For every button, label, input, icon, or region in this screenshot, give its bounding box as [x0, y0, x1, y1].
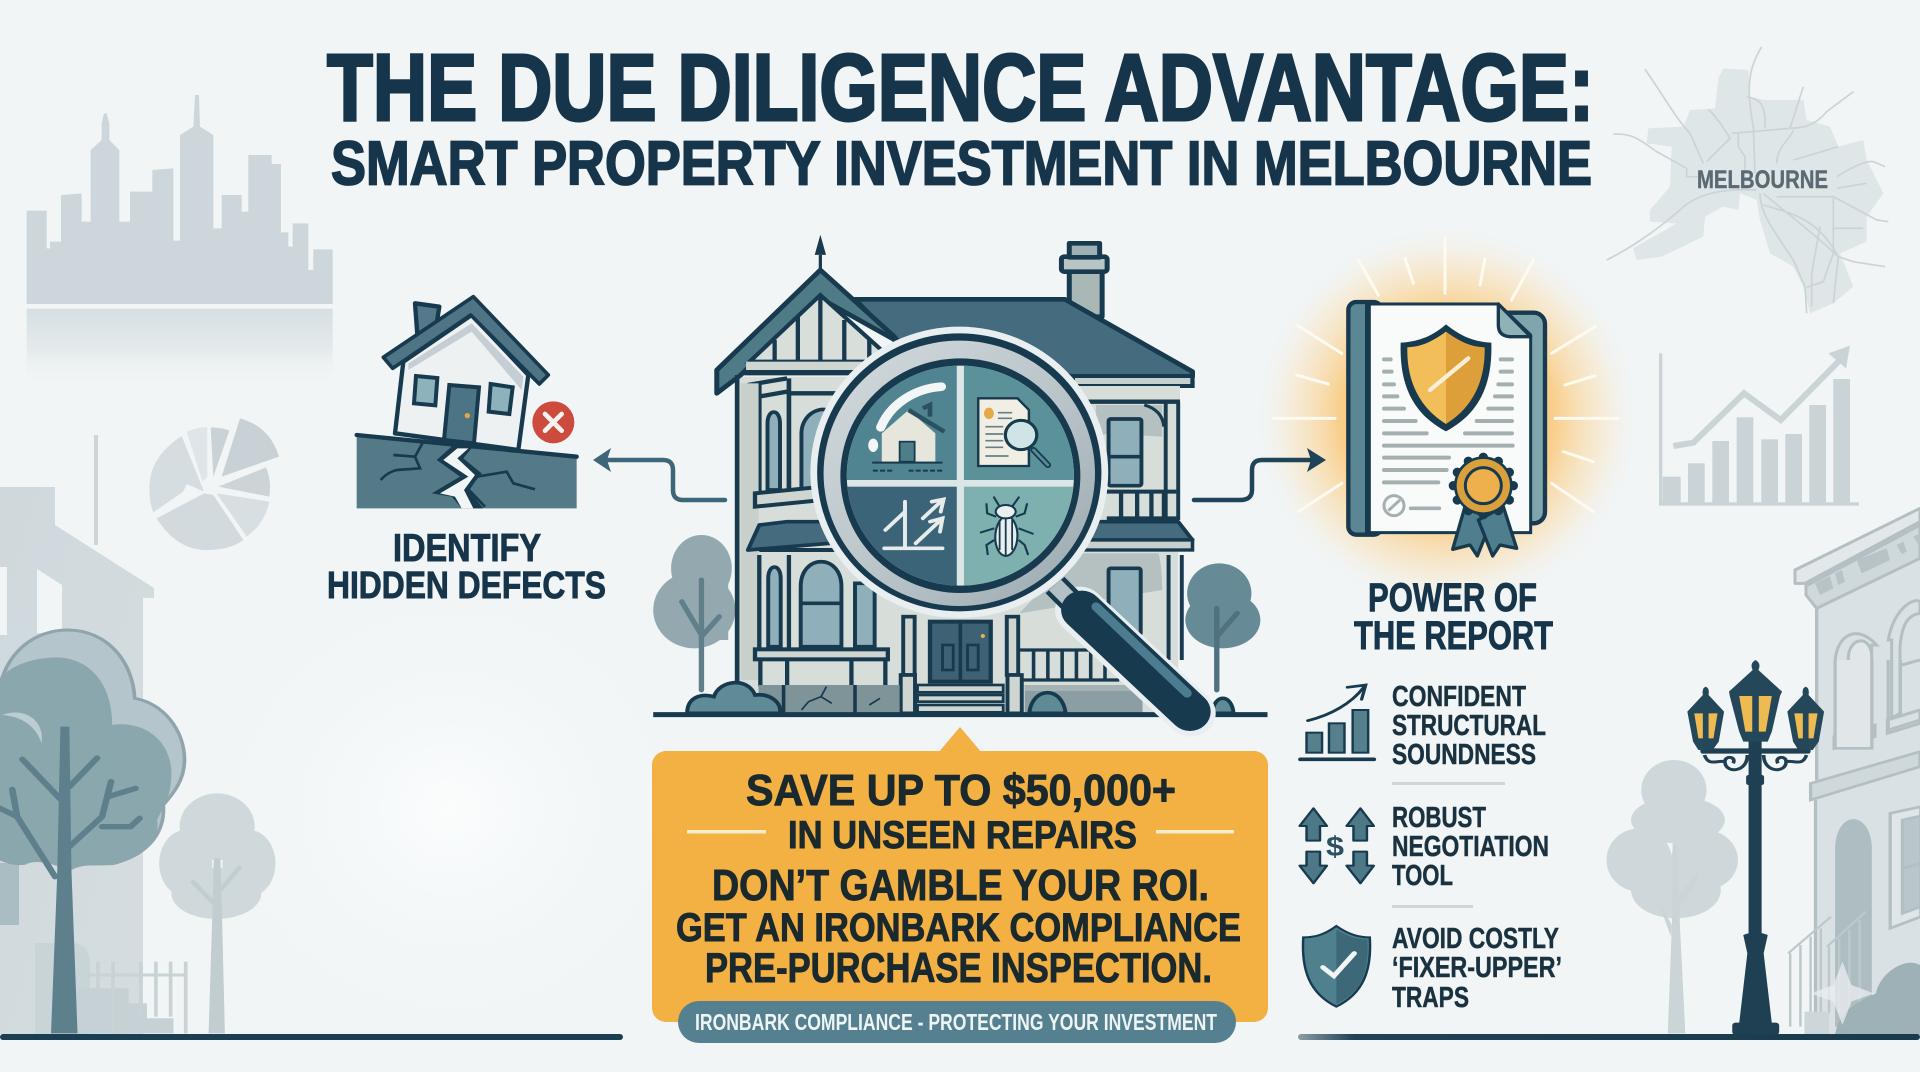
label: STRUCTURAL: [1392, 710, 1546, 742]
label: [1392, 802, 1549, 892]
chimney: [1061, 243, 1107, 317]
tree right of house: [1185, 563, 1260, 690]
lower left windows: [768, 562, 875, 647]
label: Melbourne: MELBOURNE: [1697, 166, 1828, 194]
canopy highlight: [2, 713, 42, 743]
label: SOUNDNESS: [1392, 739, 1536, 771]
cornice: [1795, 508, 1920, 780]
callout pointer: [938, 727, 982, 753]
skyline reflection: [27, 309, 333, 389]
lower left rail: [755, 649, 888, 659]
porch columns: [901, 617, 1022, 713]
walls: [395, 315, 528, 450]
icon: bar chart: [1300, 685, 1374, 759]
right upper window: [1109, 419, 1141, 486]
tree canopy outer: [0, 630, 184, 868]
ground line right: [1298, 1034, 1920, 1040]
ground: [653, 707, 1267, 722]
tree branches: [0, 758, 140, 877]
ground line left: [0, 1034, 623, 1040]
neck: [1055, 585, 1078, 608]
belt course: [1811, 752, 1920, 800]
roof: [383, 297, 548, 384]
canopy: [1607, 760, 1738, 918]
arrow: to report: [1194, 448, 1326, 500]
lamp post: [1700, 737, 1811, 1035]
trunk: [1217, 608, 1237, 690]
trunk: [682, 580, 719, 690]
trend arrow: [1673, 346, 1850, 446]
tree left of house: [653, 535, 735, 690]
building wall: [1815, 535, 1920, 1034]
label: AVOID COSTLY: [1392, 923, 1559, 955]
right balcony: [1107, 492, 1176, 518]
label: ROBUST: [1392, 802, 1486, 834]
savings headline: SAVE UP TO $50,000+: [746, 767, 1176, 815]
background: city skyline: [27, 95, 333, 389]
lamp scrolls: [1704, 755, 1807, 770]
spine: [1348, 302, 1382, 535]
report glow: [1252, 223, 1642, 613]
icon: defective house: [357, 297, 577, 508]
inner ring: [840, 358, 1080, 593]
background: Melbourne map: [1607, 47, 1888, 313]
upper windows: [1835, 660, 1920, 748]
center lantern: [1729, 660, 1782, 742]
skyline silhouette: [27, 95, 333, 304]
title line 1: THE DUE DILIGENCE ADVANTAGE:: [327, 35, 1594, 141]
tree trunk: [51, 727, 78, 1033]
outer halo: [810, 327, 1108, 618]
icon: shield check: [1303, 926, 1370, 1007]
magnifying glass: [810, 327, 1191, 713]
lens icon: growth: [884, 499, 944, 548]
page: [1369, 304, 1531, 533]
doorway: [1835, 819, 1872, 1027]
chimney: [415, 303, 439, 335]
main roof: [855, 299, 1192, 377]
dark window: [0, 863, 19, 925]
central fissure: [432, 445, 483, 508]
handle halo: [1080, 610, 1191, 713]
awning left: [748, 522, 830, 550]
lens icon: report: [978, 398, 1048, 466]
sparkle: [1811, 962, 1874, 1025]
callout box: [652, 751, 1268, 1022]
CTA text: DON’T GAMBLE YOUR ROI.: [712, 861, 1209, 910]
savings subhead: IN UNSEEN REPAIRS: [788, 814, 1137, 857]
label: [1392, 923, 1562, 1014]
text lines: [1384, 359, 1513, 482]
background: small tree: [159, 793, 276, 1033]
label: TOOL: [1392, 860, 1453, 892]
gable infill: [750, 295, 894, 362]
callout: savings and CTA: GET AN IRONBARK COMPLIANCE: [676, 906, 1241, 950]
background: right soft tree: [1607, 760, 1738, 1033]
metal band: [824, 341, 1095, 606]
upper left windows: [767, 409, 834, 490]
brand pill: [678, 1001, 1236, 1043]
trunk: [1658, 843, 1700, 1033]
mid band: [755, 487, 823, 507]
heading: power of the report: [1354, 576, 1553, 658]
label: [1392, 681, 1546, 771]
right lower window: [1109, 568, 1141, 635]
canopy: [653, 535, 735, 648]
background: growth chart: [1659, 346, 1859, 506]
benefit: negotiation tool: $: [1326, 831, 1344, 862]
bushes: [687, 683, 1234, 713]
canopy: [1185, 563, 1260, 648]
background: left building: [0, 435, 154, 1034]
front steps: [917, 685, 1003, 712]
background: left fence and steps: [78, 962, 188, 1033]
handle: [1082, 610, 1190, 712]
map roads: [1607, 47, 1888, 313]
stone base: [759, 685, 900, 713]
icon: inspection report: [1273, 238, 1618, 556]
seal: [1449, 453, 1518, 519]
railing: [1788, 912, 1866, 1027]
porch shadow upper: [1096, 405, 1162, 437]
door: [444, 385, 479, 443]
building silhouette: [0, 487, 154, 1034]
right awning: [1084, 522, 1192, 540]
background: pie chart: [149, 418, 279, 550]
lens icon: house: [868, 387, 944, 471]
brand pill: IRONBARK COMPLIANCE - PROTECTING YOUR INVESTMENT: [695, 1009, 1217, 1035]
label: NEGOTIATION: [1392, 831, 1549, 863]
label: TRAPS: [1392, 982, 1469, 1014]
warning badge: [532, 401, 574, 443]
spire: [817, 241, 824, 271]
porch shadow lower: [1019, 553, 1162, 613]
right window: [1890, 807, 1920, 928]
street lamp: [1687, 660, 1824, 1035]
lens quadrants: [846, 366, 1074, 586]
bars: [1663, 379, 1850, 503]
heading: identify hidden defects: HIDDEN DEFECTS: [327, 565, 606, 607]
label: CONFIDENT: [1392, 681, 1526, 713]
windows: [414, 376, 513, 414]
tree canopy inner: [0, 657, 171, 868]
bush: [1835, 963, 1920, 1035]
heading: identify hidden defects: [327, 527, 606, 607]
eaves right: [1073, 376, 1192, 386]
ribbon tails: [1453, 507, 1517, 556]
light rays: [1273, 238, 1618, 512]
outer ring: [817, 333, 1101, 611]
benefit: negotiation tool: [1300, 802, 1549, 892]
crack lines: [381, 442, 535, 507]
label: ‘FIXER-UPPER’: [1392, 952, 1562, 984]
axes: [1659, 353, 1662, 505]
lens icon: termite bug: [980, 497, 1034, 556]
door: [930, 622, 991, 682]
small trunk: [209, 858, 225, 1033]
porch rail: [1019, 650, 1119, 680]
left lantern: [1687, 687, 1724, 750]
small canopy: [159, 793, 276, 919]
title line 2: SMART PROPERTY INVESTMENT IN MELBOURNE: [331, 130, 1592, 198]
map shape: [1633, 68, 1883, 313]
back cover: [1483, 313, 1545, 523]
antenna pole: [94, 435, 98, 545]
left wall and tower lines: [737, 375, 837, 687]
light windows: [0, 567, 62, 635]
side dashes: [687, 830, 1234, 834]
lower facade: [1788, 660, 1920, 1035]
callout: savings and CTA: PRE-PURCHASE INSPECTION.: [705, 944, 1212, 991]
heading: power of the report: POWER OF: [1368, 576, 1537, 620]
right lantern: [1787, 687, 1824, 750]
shield: [1401, 324, 1491, 431]
foundation cracks: [801, 687, 880, 710]
callout: savings and CTA: [652, 727, 1268, 1043]
background: large tree: [0, 630, 184, 1033]
gable: [717, 270, 898, 393]
benefit: structural soundness: [1300, 681, 1546, 771]
heading: power of the report: THE REPORT: [1354, 614, 1553, 658]
house body: [737, 377, 1178, 713]
title: [327, 35, 1594, 198]
background: right building: [1788, 508, 1920, 1035]
corner fold: [1498, 304, 1531, 337]
arrow: to defects: [593, 448, 725, 500]
stamp: [1384, 496, 1439, 516]
icon: price arrows: [1300, 808, 1374, 883]
right posts: [1166, 402, 1182, 660]
cracked ground: [357, 435, 577, 508]
central Victorian house: [653, 241, 1267, 715]
doorway: [35, 943, 90, 1034]
heading: identify hidden defects: IDENTIFY: [393, 527, 541, 570]
benefit: avoid fixer-upper traps: [1303, 923, 1562, 1014]
soft light patch: [180, 560, 720, 1060]
arched windows: [1834, 601, 1920, 748]
